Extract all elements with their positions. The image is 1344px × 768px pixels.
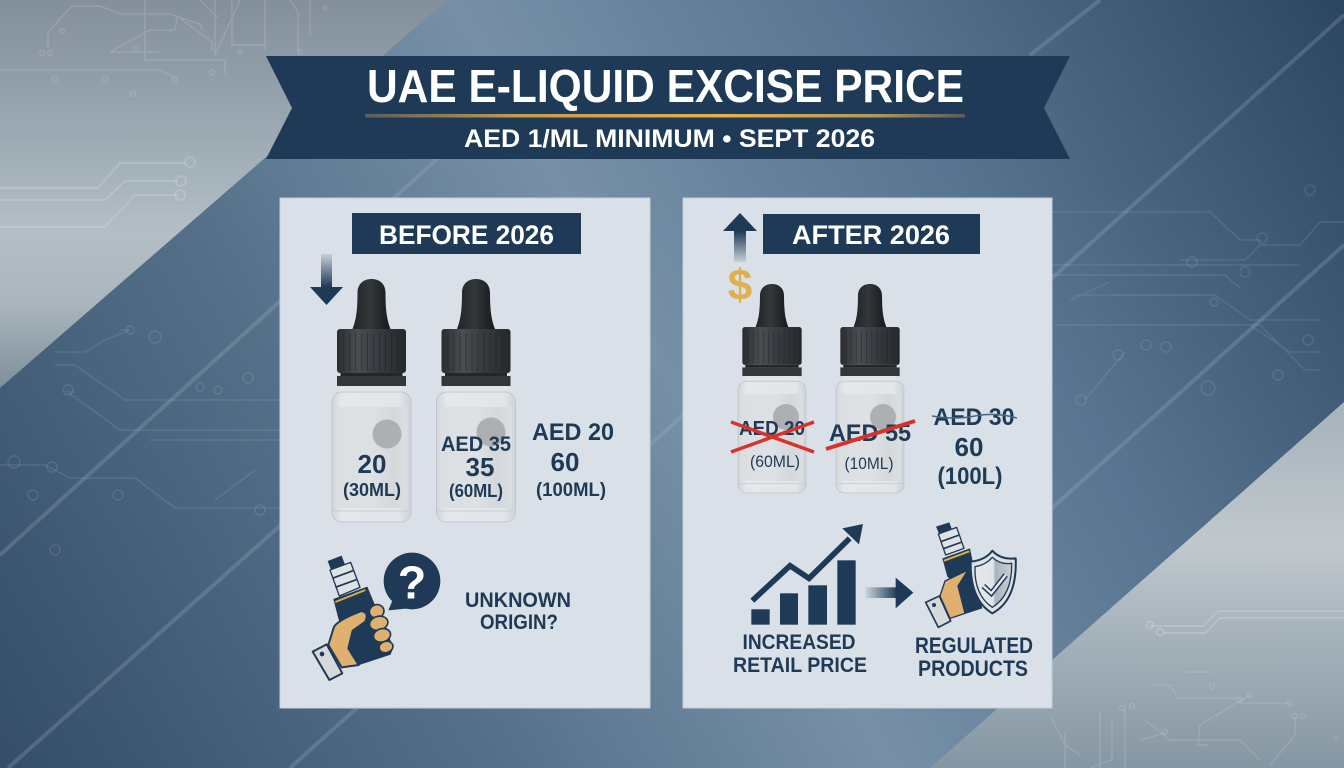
label: increased retail price [733,631,867,677]
title banner [266,56,1070,159]
bottle: 60ml [436,279,516,522]
bottle: crossed 60ml [731,284,814,493]
heading: after 2026 [763,214,980,254]
heading: after 2026: AFTER 2026 [792,220,950,250]
bottle: crossed 10ml: (10ML) [844,454,894,473]
price: 100l: (100L) [938,463,1002,490]
icon: question bubble: ? [398,556,426,608]
bottle: crossed 60ml: (60ML) [750,452,800,471]
panel: before 2026 [280,198,650,708]
label: unknown origin: ORIGIN? [480,611,558,634]
subtitle: AED 1/ML MINIMUM • SEPT 2026 [464,125,875,153]
price: 100ml: AED 20 [532,419,614,446]
heading: before 2026: BEFORE 2026 [379,220,554,250]
arrow: price down [310,254,343,305]
price: 100l: AED 30 [934,404,1014,431]
icon: hand with unknown vape [313,553,440,680]
heading: before 2026 [352,213,581,254]
label: regulated products: PRODUCTS [918,656,1028,681]
label: increased retail price: INCREASED [742,631,856,654]
icon: dollar sign: $ [728,261,752,310]
arrow: price to regulation [866,578,913,608]
bottle: 60ml: 35 [466,452,494,482]
gold divider [365,114,965,118]
label: regulated products: REGULATED [915,633,1033,658]
label: increased retail price: RETAIL PRICE [733,654,867,677]
price: 100ml: 60 [551,447,579,477]
bottle: crossed 10ml: AED 55 [829,420,911,447]
title: UAE E-LIQUID EXCISE PRICE [367,60,964,112]
bottle: crossed 60ml: AED 20 [739,418,805,440]
chart: rising price [751,524,863,625]
price: 100l [932,404,1017,490]
label: unknown origin: UNKNOWN [465,589,571,612]
bottle: 30ml: (30ML) [343,480,401,500]
icon: hand with regulated vape and shield [926,522,1016,627]
price: 100ml [532,419,614,501]
label: regulated products [915,633,1033,681]
label: unknown origin [465,589,571,634]
panel: after 2026 [683,198,1052,708]
price: 100ml: (100ML) [536,480,606,501]
bottle: 30ml: 20 [358,449,386,479]
bottle: 30ml [332,279,411,522]
arrow: price up [723,213,757,262]
bottle: crossed 10ml [826,284,915,493]
price: 100l: 60 [955,432,983,462]
bottle: 60ml: (60ML) [449,481,503,501]
bottle: 60ml: AED 35 [441,433,511,456]
